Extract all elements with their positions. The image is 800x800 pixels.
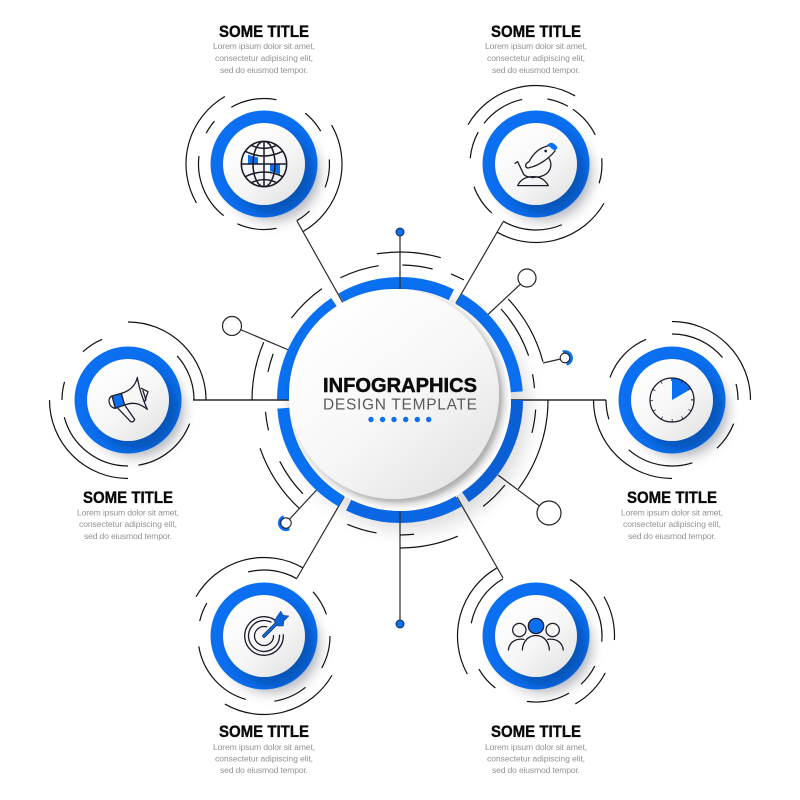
text: SOME TITLE	[491, 723, 581, 741]
blue ring	[482, 110, 590, 218]
text	[621, 489, 723, 541]
text: consectetur adipiscing elit,	[487, 53, 585, 63]
icon: microscope	[515, 143, 558, 186]
panel: bottom left node	[157, 529, 371, 775]
hub title: INFOGRAPHICS	[323, 374, 477, 397]
white disc	[223, 123, 305, 205]
panel: right node	[587, 315, 757, 541]
node soft shadow	[494, 124, 594, 224]
hub dots	[368, 417, 431, 422]
terminal circle: upper right	[518, 269, 536, 287]
node soft shadow	[86, 360, 186, 460]
hub title: DESIGN TEMPLATE	[323, 396, 477, 414]
text	[77, 489, 179, 541]
white disc	[223, 595, 305, 677]
terminal ring: lower left	[277, 514, 295, 532]
icon: megaphone	[109, 377, 148, 422]
terminal ring: right	[557, 350, 573, 366]
text: SOME TITLE	[627, 489, 717, 507]
node soft shadow	[630, 360, 730, 460]
text	[485, 723, 587, 775]
arcs	[35, 307, 221, 493]
white disc	[495, 595, 577, 677]
central hub	[240, 240, 560, 560]
text: sed do eiusmod tempor.	[220, 65, 308, 75]
arcs	[429, 529, 643, 743]
arcs	[157, 529, 371, 743]
text: Lorem ipsum dolor sit amet,	[77, 508, 179, 518]
icon: clock	[650, 378, 694, 422]
hub arcs	[191, 191, 609, 609]
white disc	[495, 123, 577, 205]
text: sed do eiusmod tempor.	[492, 765, 580, 775]
text: Lorem ipsum dolor sit amet,	[213, 41, 315, 51]
text: sed do eiusmod tempor.	[628, 531, 716, 541]
blue ring	[482, 582, 590, 690]
hub outer soft shadow	[291, 293, 529, 531]
blue ring	[210, 110, 318, 218]
blue ring	[618, 346, 726, 454]
panel: bottom right node	[429, 529, 643, 775]
hub raised disc	[289, 289, 499, 499]
terminal dot: bottom	[396, 620, 404, 628]
text: consectetur adipiscing elit,	[623, 519, 721, 529]
terminal circle: lower right	[537, 501, 561, 525]
terminal dot: top	[396, 228, 404, 236]
text	[213, 723, 315, 775]
text: Lorem ipsum dolor sit amet,	[485, 742, 587, 752]
white disc	[631, 359, 713, 441]
blue ring	[210, 582, 318, 690]
white disc	[87, 359, 169, 441]
hub tick lines over ring	[277, 277, 400, 523]
icon: globe	[241, 141, 287, 187]
panel: top right node	[429, 23, 643, 271]
text: consectetur adipiscing elit,	[487, 754, 585, 764]
panel: top left node	[157, 23, 371, 271]
text: consectetur adipiscing elit,	[79, 519, 177, 529]
text: SOME TITLE	[83, 489, 173, 507]
text: SOME TITLE	[219, 23, 309, 41]
text: sed do eiusmod tempor.	[84, 531, 172, 541]
arcs	[587, 315, 757, 485]
node soft shadow	[222, 124, 322, 224]
hub segmented blue ring	[240, 240, 560, 560]
text	[485, 23, 587, 75]
icon: people	[508, 618, 563, 650]
blue ring	[74, 346, 182, 454]
hub white base	[289, 289, 511, 511]
text: SOME TITLE	[491, 23, 581, 41]
text: Lorem ipsum dolor sit amet,	[485, 41, 587, 51]
hub title	[323, 374, 477, 414]
text: consectetur adipiscing elit,	[215, 754, 313, 764]
arcs	[429, 57, 643, 271]
arcs	[157, 57, 371, 271]
text: Lorem ipsum dolor sit amet,	[213, 742, 315, 752]
text: SOME TITLE	[219, 723, 309, 741]
text: Lorem ipsum dolor sit amet,	[621, 508, 723, 518]
node soft shadow	[222, 596, 322, 696]
node soft shadow	[494, 596, 594, 696]
terminal circle: upper left	[222, 316, 242, 336]
panel: left node	[35, 307, 221, 541]
text: sed do eiusmod tempor.	[492, 65, 580, 75]
icon: target with arrow	[243, 611, 289, 657]
text: consectetur adipiscing elit,	[215, 53, 313, 63]
text	[213, 23, 315, 75]
connector lines	[193, 221, 606, 624]
text: sed do eiusmod tempor.	[220, 765, 308, 775]
